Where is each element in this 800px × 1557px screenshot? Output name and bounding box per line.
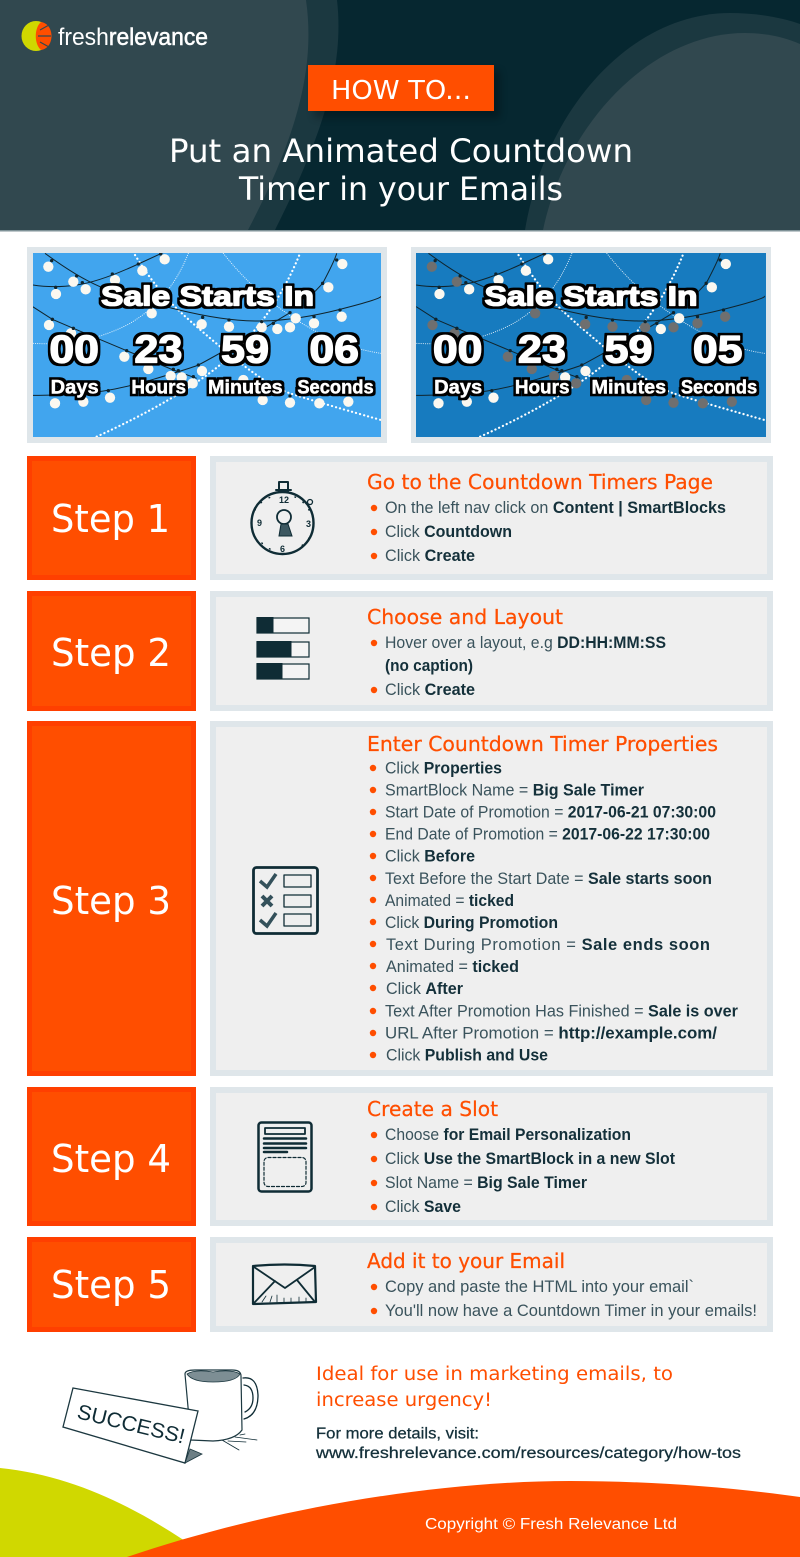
logo: fresh relevance: freshrelevance xyxy=(58,24,208,51)
bullet list: Click After xyxy=(386,980,464,998)
bullet list: End Date of Promotion = 2017-06-22 17:30:00 xyxy=(385,826,710,844)
bullet list: On the left nav click on Content | SmartBlocks xyxy=(385,499,726,517)
bullet list: Click Countdown xyxy=(385,523,512,541)
step 1 label: Step 1 xyxy=(51,497,170,541)
bullet list xyxy=(370,760,739,1064)
bullet list: Animated = ticked xyxy=(386,958,519,976)
bullet list xyxy=(371,1278,757,1320)
countdown timer frame: dark blue: Seconds xyxy=(681,376,757,398)
bullet list: Slot Name = Big Sale Timer xyxy=(385,1174,588,1192)
bullet list: URL After Promotion = http://example.com/ xyxy=(385,1024,717,1042)
bullet list: Copy and paste the HTML into your email` xyxy=(385,1278,694,1296)
countdown timer frame: dark blue: Days xyxy=(434,376,482,398)
title: Put an Animated Countdown xyxy=(169,132,633,170)
countdown timer frame: dark blue: 23 xyxy=(518,328,566,372)
panel: step 5 xyxy=(210,1237,773,1332)
icon: layout sliders xyxy=(256,617,309,679)
footer green curve xyxy=(0,1468,215,1557)
heading: Go to the Countdown Timers Page xyxy=(367,470,713,494)
how to badge: HOW TO... xyxy=(331,76,471,106)
bullet list: Click Properties xyxy=(385,760,502,778)
title xyxy=(169,132,633,208)
closing message: increase urgency! xyxy=(316,1390,492,1411)
countdown timer frame: light blue: Hours xyxy=(131,376,186,398)
countdown timer frame: light blue xyxy=(27,247,387,443)
illustration: success sign and mug xyxy=(63,1370,258,1463)
countdown timer frame: light blue: 23 xyxy=(134,328,182,372)
step 3 label xyxy=(27,721,196,1076)
heading: Enter Countdown Timer Properties xyxy=(367,732,718,756)
step 3 label: Step 3 xyxy=(51,879,171,923)
bullet list: Text After Promotion Has Finished = Sale is over xyxy=(385,1002,739,1020)
countdown timer frame: dark blue: Hours xyxy=(515,376,570,398)
header banner xyxy=(0,0,800,232)
title: Timer in your Emails xyxy=(238,170,563,208)
panel: step 4 xyxy=(210,1087,773,1226)
closing message xyxy=(316,1364,673,1411)
countdown timer frame: light blue: 06 xyxy=(309,328,359,372)
heading: Choose and Layout xyxy=(367,605,563,629)
countdown timer frame: dark blue: 05 xyxy=(693,328,742,372)
countdown timer frame: light blue: Seconds xyxy=(297,376,374,398)
bullet list: SmartBlock Name = Big Sale Timer xyxy=(385,782,645,800)
countdown timer frame: light blue: Sale Starts In xyxy=(101,281,314,312)
countdown timer frame: light blue: Days xyxy=(51,376,99,398)
step 5 label: Step 5 xyxy=(51,1263,171,1307)
countdown timer frame: light blue: 00 xyxy=(49,328,99,372)
bullet list: Click Create xyxy=(385,681,475,699)
bullet list: You'll now have a Countdown Timer in your emails! xyxy=(385,1302,757,1320)
bullet list: Start Date of Promotion = 2017-06-21 07:30:00 xyxy=(385,804,716,822)
countdown timer frame: dark blue xyxy=(411,247,771,443)
bullet list xyxy=(371,499,726,565)
step 1 label xyxy=(27,456,196,580)
icon: stopwatch: 6 xyxy=(280,544,285,554)
countdown timer frame: dark blue: 59 xyxy=(604,328,652,372)
countdown timer frame: dark blue: Minutes xyxy=(592,376,666,398)
countdown timer frame: dark blue: 00 xyxy=(433,328,483,372)
icon: envelope xyxy=(253,1264,316,1304)
bullet list: Click Create xyxy=(385,547,475,565)
step 4 label: Step 4 xyxy=(51,1137,171,1181)
bullet list: Animated = ticked xyxy=(385,892,514,910)
bullet list: (no caption) xyxy=(385,657,473,675)
step 5 label xyxy=(27,1237,196,1332)
bullet list: Click Use the SmartBlock in a new Slot xyxy=(385,1150,675,1168)
step 4 label xyxy=(27,1087,196,1226)
illustration: success sign and mug: SUCCESS! xyxy=(75,1400,187,1449)
icon: stopwatch: 3 xyxy=(306,519,311,529)
more details link text xyxy=(315,1426,741,1462)
copyright: Copyright © Fresh Relevance Ltd xyxy=(425,1516,677,1533)
footer orange curve xyxy=(127,1481,800,1557)
bullet list: Text Before the Start Date = Sale starts soon xyxy=(385,870,712,888)
countdown timer frame: light blue: 59 xyxy=(221,328,269,372)
bullet list xyxy=(371,634,666,699)
more details link text: www.freshrelevance.com/resources/category/how-tos xyxy=(315,1445,741,1462)
icon: checklist xyxy=(254,868,318,934)
bullet list: Text During Promotion = Sale ends soon xyxy=(386,936,710,954)
closing message: Ideal for use in marketing emails, to xyxy=(316,1364,673,1385)
bullet list xyxy=(371,1126,675,1216)
panel: step 2 xyxy=(210,591,773,711)
heading: Create a Slot xyxy=(367,1097,498,1121)
bullet list: Click Save xyxy=(385,1198,461,1216)
bullet list: Choose for Email Personalization xyxy=(385,1126,631,1144)
icon: stopwatch xyxy=(252,482,314,554)
icon: stopwatch: 12 xyxy=(279,495,289,505)
icon: document xyxy=(258,1122,312,1192)
bullet list: Click Before xyxy=(385,848,475,866)
step 2 label xyxy=(27,591,196,711)
countdown timer frame: dark blue: Sale Starts In xyxy=(484,281,698,312)
panel: step 3 xyxy=(210,721,773,1076)
how to badge xyxy=(308,65,500,118)
heading: Add it to your Email xyxy=(367,1249,565,1273)
bullet list: Hover over a layout, e.g DD:HH:MM:SS xyxy=(385,634,666,652)
bullet list: Click Publish and Use xyxy=(386,1046,548,1064)
panel: step 1 xyxy=(210,456,773,580)
countdown timer frame: light blue: Minutes xyxy=(208,376,283,398)
step 2 label: Step 2 xyxy=(51,631,171,675)
more details link text: For more details, visit: xyxy=(316,1426,479,1442)
icon: stopwatch: 9 xyxy=(257,518,262,528)
bullet list: Click During Promotion xyxy=(385,914,558,932)
